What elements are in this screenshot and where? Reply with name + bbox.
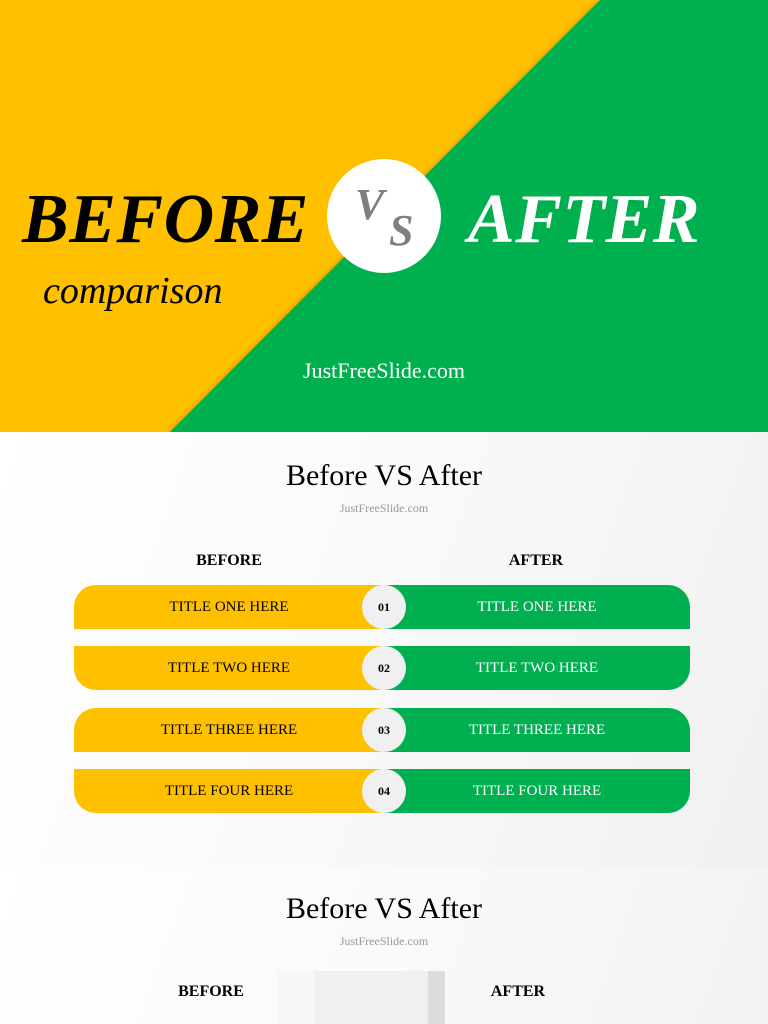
row 4: TITLE FOUR HERE	[473, 783, 601, 799]
panel: comparison table	[0, 432, 768, 866]
column label: after: AFTER	[509, 552, 563, 569]
column label: before: BEFORE	[196, 552, 262, 569]
row 1	[74, 585, 690, 629]
row 4: TITLE FOUR HERE	[165, 783, 293, 799]
title: AFTER: AFTER	[468, 181, 700, 258]
row 1: TITLE ONE HERE	[477, 599, 597, 615]
center graphic	[278, 971, 445, 1024]
row 2: 02	[378, 661, 390, 675]
icon: VS circle: V	[355, 180, 384, 229]
row 2: TITLE TWO HERE	[476, 660, 598, 676]
heading: Before VS After	[286, 459, 482, 492]
column label: before: BEFORE	[178, 983, 244, 1000]
website text: JustFreeSlide.com	[303, 358, 465, 383]
panel: second comparison	[0, 866, 768, 1024]
subtitle: comparison: comparison	[43, 270, 222, 312]
row 1: 01	[378, 600, 390, 614]
row 4: 04	[378, 784, 390, 798]
icon: VS circle	[327, 159, 441, 273]
subheading: JustFreeSlide.com	[340, 934, 428, 948]
row 3: 03	[378, 723, 390, 737]
row 1: TITLE ONE HERE	[169, 599, 289, 615]
row 3: TITLE THREE HERE	[161, 722, 297, 738]
row 2: TITLE TWO HERE	[168, 660, 290, 676]
column label: after: AFTER	[491, 983, 545, 1000]
heading: Before VS After	[286, 892, 482, 925]
icon: VS circle: S	[389, 206, 413, 255]
row 3	[74, 708, 690, 752]
title: BEFORE: BEFORE	[22, 181, 309, 258]
row 3: TITLE THREE HERE	[469, 722, 605, 738]
subheading: JustFreeSlide.com	[340, 501, 428, 515]
hero banner	[0, 0, 768, 432]
row 2	[74, 646, 690, 690]
row 4	[74, 769, 690, 813]
